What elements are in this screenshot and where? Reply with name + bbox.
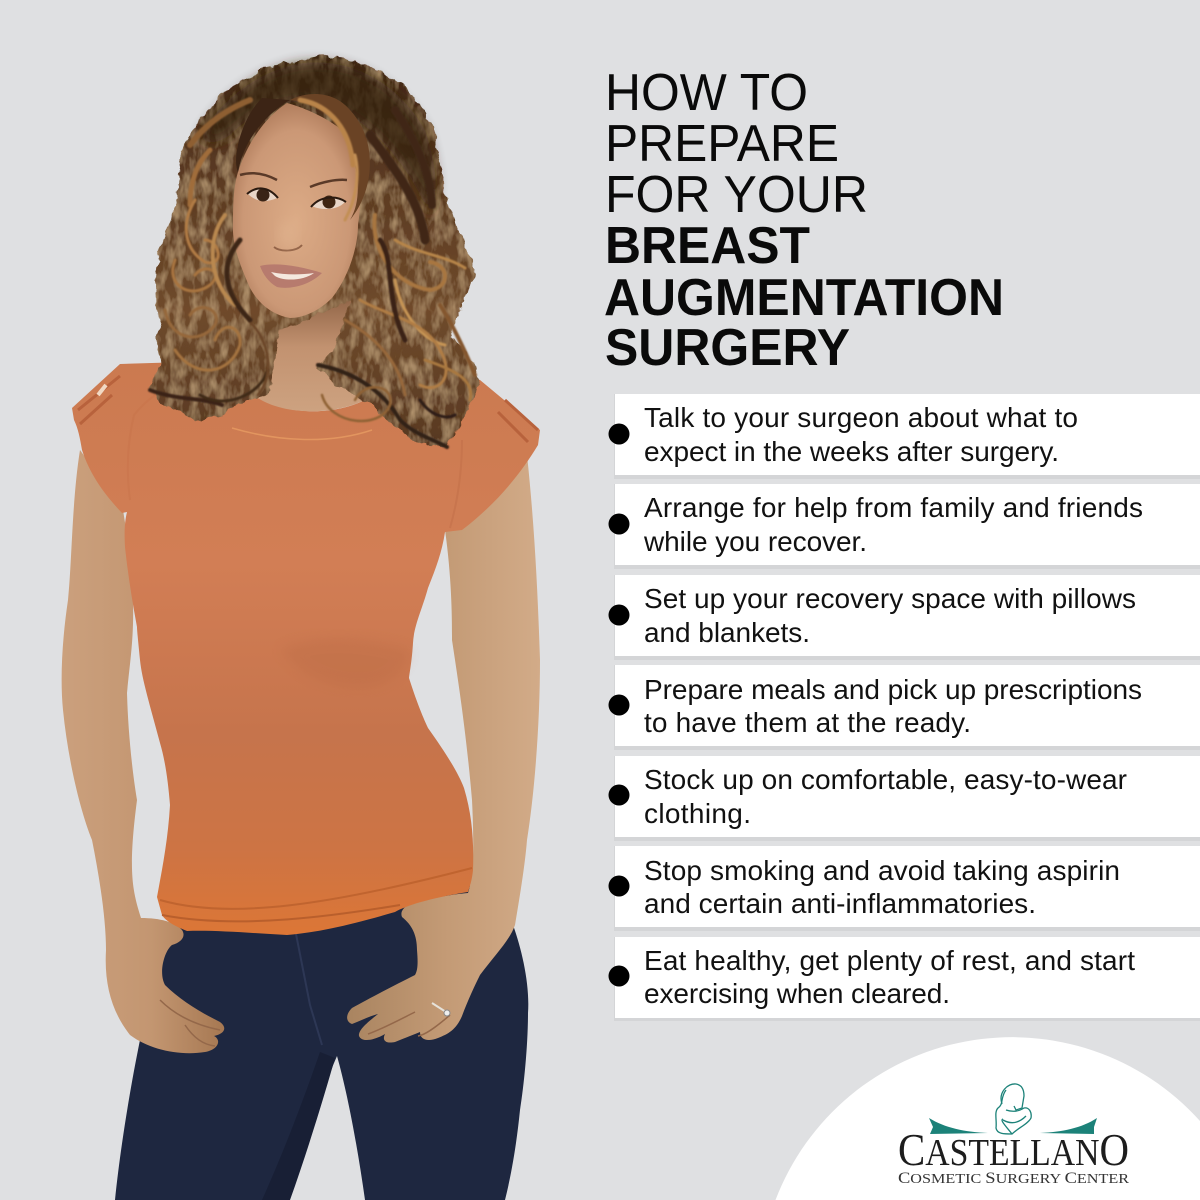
title (604, 64, 1004, 377)
text: Talk to your surgeon about what to (644, 402, 1078, 433)
bullet (608, 694, 630, 716)
logo wordmark: CASTELLANO (898, 1124, 1129, 1175)
title: HOW TO (605, 64, 808, 122)
title: BREAST (605, 217, 810, 275)
text: Stop smoking and avoid taking aspirin (644, 855, 1120, 886)
right arm (347, 455, 540, 1043)
text: exercising when cleared. (644, 978, 950, 1009)
jeans (115, 885, 528, 1200)
title: AUGMENTATION (604, 269, 1004, 327)
text (644, 583, 1136, 648)
text: clothing. (644, 798, 751, 829)
text: expect in the weeks after surgery. (644, 436, 1059, 467)
face (233, 103, 360, 318)
title: PREPARE (605, 115, 839, 173)
bullet (608, 784, 630, 806)
panel: stop smoking (608, 846, 1200, 931)
text (643, 492, 1143, 557)
left arm (62, 450, 224, 1053)
text: Eat healthy, get plenty of rest, and start (644, 945, 1135, 976)
panel: comfortable clothing (608, 756, 1200, 841)
hair locks over the face (290, 94, 370, 220)
text (644, 764, 1127, 829)
facial features (240, 173, 347, 288)
title: SURGERY (605, 319, 850, 377)
title: FOR YOUR (605, 166, 868, 224)
text (644, 402, 1078, 467)
panel: eat healthy (608, 937, 1200, 1021)
text: and certain anti-inflammatories. (644, 888, 1036, 919)
panel: arrange for help (608, 484, 1200, 569)
logo badge: Castellano Cosmetic Surgery Center (776, 1037, 1200, 1200)
panel: meals and prescriptions (608, 665, 1200, 750)
hand and ring details (160, 1000, 450, 1046)
logo tagline: COSMETIC SURGERY CENTER (898, 1170, 1130, 1187)
photo: woman in orange t-shirt and navy jeans (62, 56, 540, 1200)
text (644, 945, 1135, 1009)
bullet (608, 514, 630, 534)
text: Prepare meals and pick up prescriptions (644, 674, 1142, 705)
text: Stock up on comfortable, easy-to-wear (644, 764, 1127, 795)
hair mass (147, 56, 480, 447)
bullet (608, 966, 630, 986)
text: while you recover. (643, 526, 867, 557)
bullet (608, 604, 630, 626)
text (644, 855, 1120, 919)
panel: talk to surgeon (608, 394, 1200, 479)
hair crown shadow (200, 62, 435, 215)
bullet (608, 876, 630, 896)
text: and blankets. (644, 617, 810, 648)
text (644, 674, 1142, 738)
text: Arrange for help from family and friends (644, 492, 1143, 523)
panel: recovery space (608, 575, 1200, 660)
hair highlights and curls (150, 100, 475, 447)
text: to have them at the ready. (644, 707, 971, 738)
bullet (608, 424, 630, 444)
text: Set up your recovery space with pillows (644, 583, 1136, 614)
t-shirt (72, 362, 540, 935)
logo icon: woman with crossed arms and wings (929, 1084, 1097, 1134)
neck (250, 295, 372, 411)
